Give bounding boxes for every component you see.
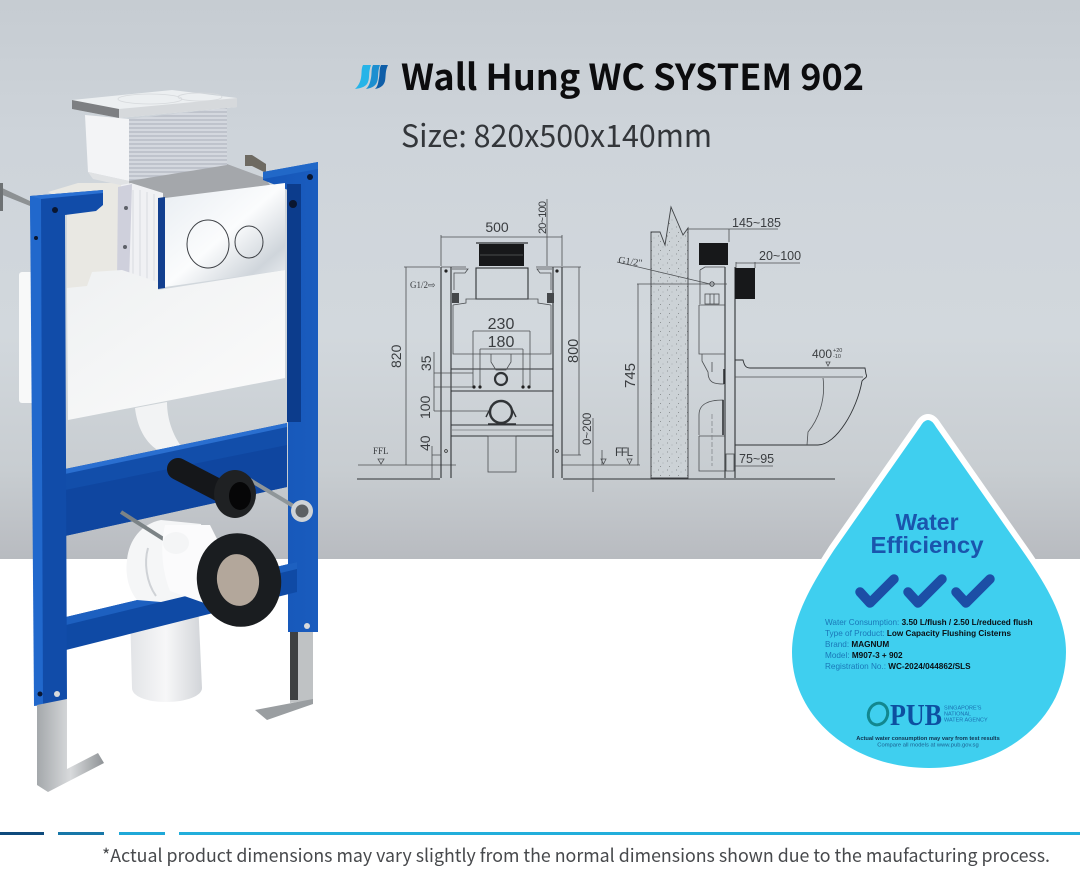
PUB logo: SINGAPORE'S (944, 706, 982, 712)
upper crossbar (65, 423, 287, 536)
floor lines (358, 464, 638, 466)
left bolt (121, 512, 165, 540)
product details: Water Consumption: 3.50 L/flush / 2.50 L/reduced flush (825, 618, 1033, 627)
drain elbow (135, 402, 181, 452)
grey tank top (129, 164, 270, 199)
technical drawing: front elevation (357, 199, 835, 492)
dimension: 745 (637, 284, 727, 465)
product details (825, 618, 1033, 671)
frame posts (441, 267, 562, 478)
upper elbow (702, 354, 724, 384)
technical drawing: side elevation: +20 (833, 348, 842, 354)
technical drawing: side elevation: -10 (833, 354, 841, 360)
top cover plate (72, 90, 237, 118)
lower drain box (488, 436, 516, 472)
background band (0, 0, 1080, 559)
valve block (705, 294, 719, 304)
dimension: plate height (546, 199, 548, 266)
PUB logo (865, 697, 988, 732)
flush buttons (187, 220, 229, 268)
G1/2 leader (617, 262, 710, 284)
footnote: *Actual product dimensions may vary slightly from the normal dimensions shown due to the maufacturing process. (102, 842, 1050, 868)
black rubber ring (188, 525, 290, 635)
technical drawing: front elevation: 800 (566, 339, 582, 363)
heading: Wall Hung WC SYSTEM 902 (401, 49, 864, 101)
side clips (452, 293, 459, 303)
front plate black (735, 268, 755, 299)
label heading: Water (895, 509, 959, 535)
dimension lines (688, 229, 729, 242)
flush box black (699, 243, 728, 265)
upper box (476, 268, 528, 299)
technical drawing: front elevation: 20~100 (537, 201, 549, 234)
dimension 230 and 180 (473, 331, 530, 387)
product details: Type of Product: Low Capacity Flushing Cisterns (825, 629, 1012, 638)
water efficiency label: Compare all models at www.pub.gov.sg (877, 742, 979, 748)
chrome flush plate (158, 197, 165, 289)
technical drawing: front elevation: G1/2⇨ (410, 280, 436, 290)
technical drawing: side elevation: 20~100 (759, 249, 801, 263)
WC pan (735, 360, 867, 445)
dimension: left vertical (434, 352, 488, 411)
dimension: 800 (562, 267, 581, 455)
studs (472, 385, 476, 389)
wall section (651, 207, 688, 478)
technical drawing: front elevation: 230 (488, 316, 514, 333)
white syphon tube (130, 600, 202, 702)
lower elbow (699, 400, 725, 471)
PUB logo: WATER AGENCY (944, 718, 988, 724)
right bolt with nut (250, 480, 300, 510)
technical drawing: front elevation: 0~200 (582, 413, 594, 445)
left stub pipe (0, 187, 30, 206)
size subheading: Size: 820x500x140mm (401, 111, 712, 156)
water efficiency label: Efficiency (870, 532, 984, 558)
flush plate black (479, 244, 524, 266)
left steel leg (37, 699, 104, 792)
product details: Registration No.: WC-2024/044862/SLS (825, 662, 971, 671)
bolt detail (726, 454, 734, 471)
white cistern body (67, 270, 285, 420)
top arm details (452, 269, 552, 290)
right steel leg (290, 632, 313, 703)
fluted box right face (129, 108, 227, 181)
fluted box left face (85, 115, 129, 181)
technical drawing: front elevation: 100 (417, 395, 433, 419)
water efficiency label (792, 420, 1066, 768)
technical drawing: front elevation: 820 (388, 344, 404, 368)
white left tab behind frame (19, 272, 35, 403)
three check marks (860, 579, 990, 603)
icon: brand stripes (355, 65, 388, 89)
technical drawing: side elevation: G1/2" (618, 255, 643, 269)
PUB logo: NATIONAL (944, 712, 971, 718)
technical drawing: side elevation: 400 (812, 347, 832, 361)
blue frame left post and arm (30, 190, 103, 708)
black waste pipe (178, 469, 232, 497)
dimension: width (441, 235, 562, 266)
trap bend (126, 520, 211, 602)
FFL markers (378, 459, 384, 464)
product details: Brand: MAGNUM (825, 640, 889, 649)
labels: 145~185 (732, 216, 781, 230)
cross rails (451, 369, 553, 436)
footer divider (0, 832, 1080, 835)
labels: 500 (485, 219, 509, 235)
PUB logo: PUB (890, 697, 942, 732)
blue frame right post and arm (263, 162, 318, 632)
outlet ring (495, 373, 507, 385)
technical drawing: front elevation: 40 (417, 435, 433, 451)
tank outline (453, 299, 551, 354)
product details: Model: M907-3 + 902 (825, 651, 903, 660)
top right valve (245, 155, 266, 173)
technical drawing: front elevation: FFL (373, 446, 389, 456)
technical drawing: side elevation: 75~95 (739, 452, 774, 466)
title block (355, 49, 864, 156)
drop shape (792, 420, 1066, 768)
product photo: wall-hung cistern frame (0, 90, 318, 792)
dimension: 0-200 (592, 418, 594, 492)
technical drawing: side elevation: 745 (622, 363, 639, 388)
white connector (162, 525, 230, 605)
upper beige tank (48, 183, 158, 303)
mounting bracket (118, 183, 163, 288)
disclaimer: Actual water consumption may vary from test results (856, 736, 1000, 742)
lower crossbar (66, 562, 297, 650)
technical drawing: front elevation: 180 (488, 334, 514, 351)
technical drawing: side elevation (615, 207, 867, 478)
pan connector ring (490, 401, 512, 423)
technical drawing: side elevation: FFL (615, 447, 634, 459)
tank (699, 305, 725, 354)
technical drawing: front elevation: 35 (418, 355, 434, 371)
dimension: 820 (404, 267, 440, 465)
frame column (725, 267, 735, 478)
